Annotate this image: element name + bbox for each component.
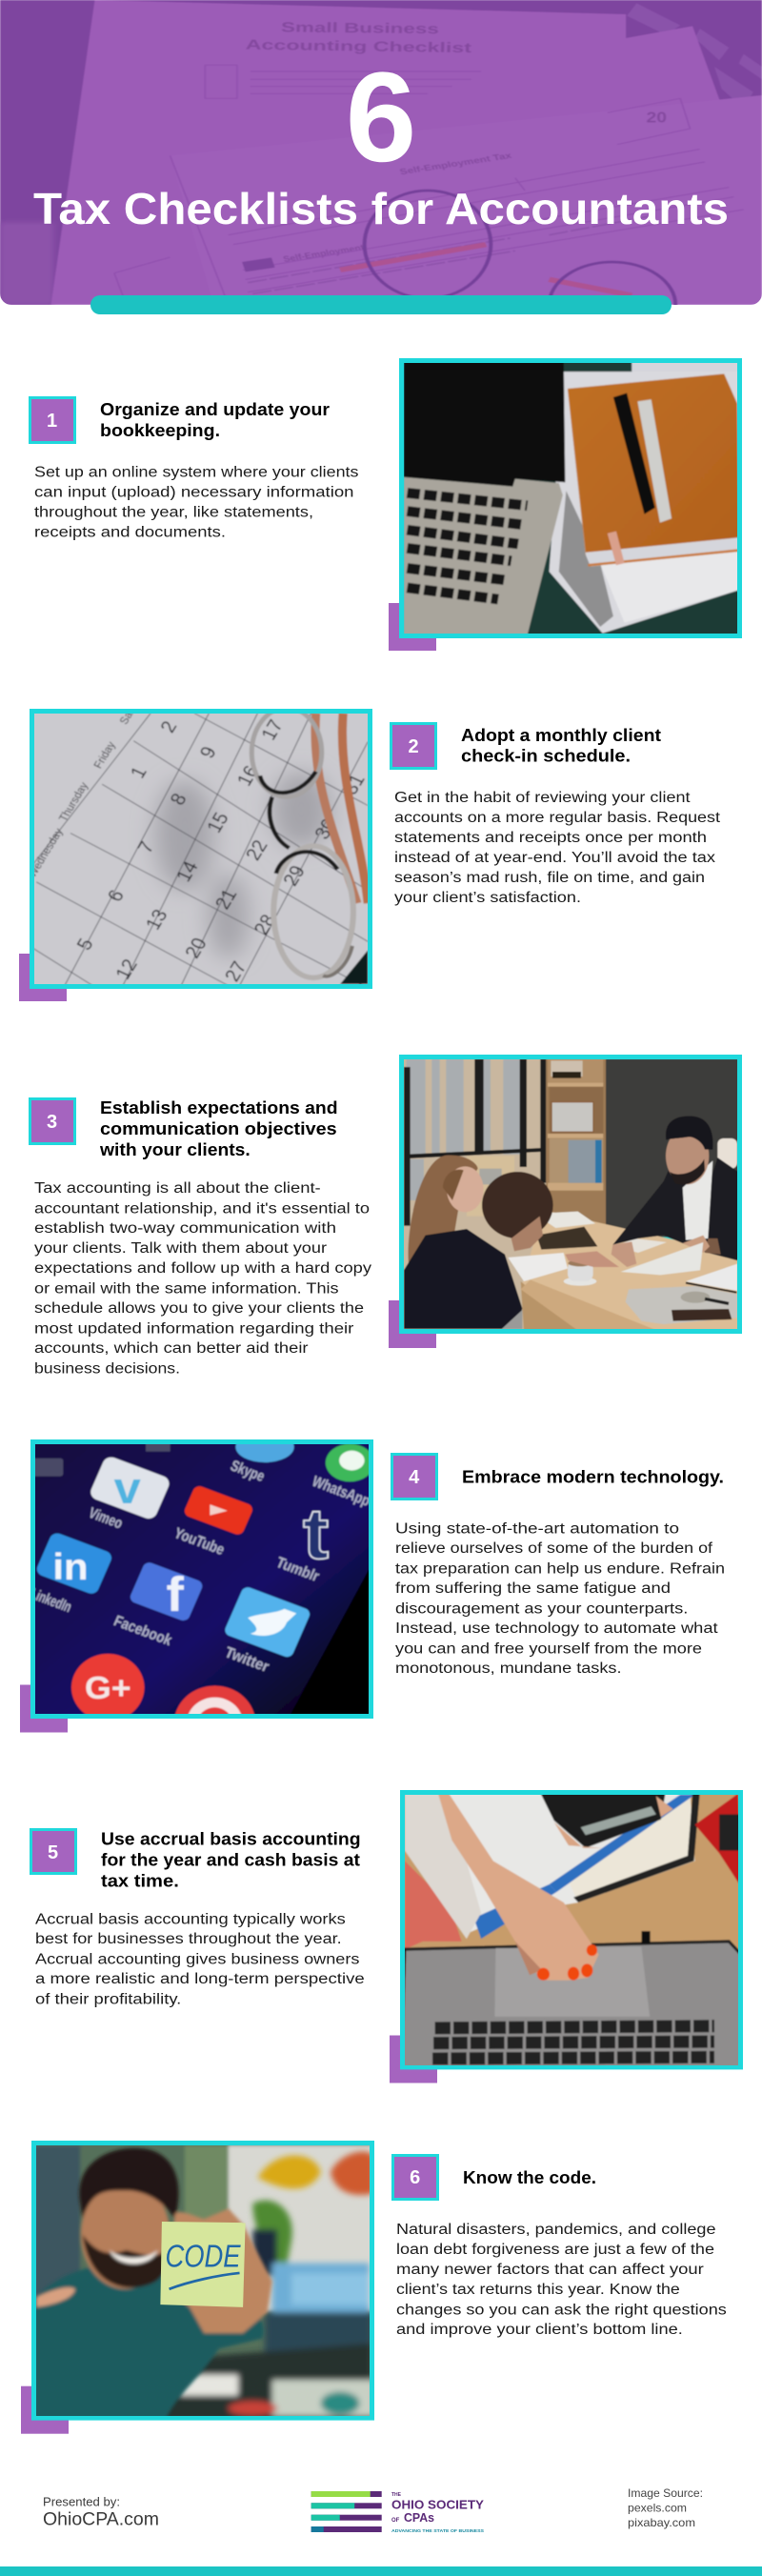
presented by: OhioCPA.com: [43, 2510, 159, 2530]
body text 2: statements and receipts once per month: [394, 830, 707, 846]
presented by: [43, 2496, 159, 2530]
body text 6: [396, 2222, 727, 2338]
body text 4: Using state-of-the-art automation to: [395, 1520, 679, 1538]
body text 1: Set up an online system where your clients: [34, 464, 359, 480]
body text 4: relieve ourselves of some of the burden of: [395, 1540, 713, 1557]
heading 3: communication objectives: [100, 1119, 337, 1138]
panel: step 1: [30, 354, 744, 651]
number badge 5: [30, 1829, 76, 1873]
number badge 2: 2: [408, 736, 419, 757]
image: calendar and glasses: 28: [251, 912, 281, 938]
banner photo: purple-tinted tax forms: 20: [647, 110, 667, 126]
image: calendar and glasses: 20: [181, 935, 211, 961]
body text 3: [34, 1180, 371, 1378]
heading 5: Use accrual basis accounting: [101, 1830, 361, 1849]
body text 4: tax preparation can help us endure. Refrain: [395, 1560, 725, 1578]
image: calendar and glasses: 22: [242, 837, 272, 864]
image: phone with social apps: [20, 1439, 373, 1732]
image: phone with social apps: Tumblr: [273, 1554, 323, 1585]
body text 6: and improve your client’s bottom line.: [396, 2322, 683, 2338]
panel: step 6: [21, 2141, 727, 2434]
body text 3: expectations and follow up with a hard copy: [34, 1260, 371, 1277]
image: man holding CODE sticky note: [21, 2141, 376, 2434]
body text 1: receipts and documents.: [34, 524, 226, 540]
image: calendar and glasses: Thursday: [57, 780, 91, 823]
number badge 6: 6: [410, 2167, 420, 2188]
body text 2: Get in the habit of reviewing your client: [394, 790, 691, 806]
body text 4: you can and free yourself from the more: [395, 1640, 702, 1658]
main title: Tax Checklists for Accountants: [33, 184, 729, 233]
image: calendar and glasses: 16: [233, 763, 264, 790]
body text 3: accountant relationship, and it's essential to: [34, 1200, 370, 1218]
number badge 4: 4: [409, 1467, 420, 1488]
image: calendar and glasses: 21: [211, 886, 242, 913]
image: calendar and glasses: 17: [257, 716, 288, 743]
body text 1: throughout the year, like statements,: [34, 504, 313, 520]
heading 3: Establish expectations and: [100, 1098, 338, 1117]
body text 5: Accrual accounting gives business owners: [35, 1951, 360, 1967]
heading 1: Organize and update your: [100, 400, 330, 419]
body text 6: Natural disasters, pandemics, and college: [396, 2222, 716, 2238]
heading 5: [101, 1830, 361, 1891]
image: calendar and glasses: 9: [196, 744, 221, 761]
banner photo: purple-tinted tax forms: Small Business: [281, 20, 439, 37]
image: calendar and glasses: [19, 707, 374, 1001]
body text 5: [35, 1911, 365, 2007]
body text 4: from suffering the same fatigue and: [395, 1580, 671, 1597]
image: calendar and glasses: 1: [127, 764, 151, 781]
heading 2: Adopt a monthly client: [461, 726, 661, 745]
image: calendar and glasses: 15: [203, 810, 233, 836]
body text 3: schedule allows you to give your clients the: [34, 1300, 364, 1317]
image: calendar and glasses: 14: [172, 858, 203, 885]
number badge 1: 1: [47, 411, 57, 432]
logo: The Ohio Society of CPAs: ADVANCING THE STATE OF BUSINESS: [391, 2528, 484, 2533]
image: calendar and glasses: Wednesday: [26, 827, 66, 879]
body text 4: discouragement as your counterparts.: [395, 1600, 688, 1618]
number badge 4: [392, 1454, 436, 1499]
heading 4: Embrace modern technology.: [462, 1468, 724, 1487]
image: phone with social apps: G+: [85, 1671, 131, 1706]
image: calendar and glasses: 5: [73, 936, 98, 954]
heading 5: tax time.: [101, 1872, 179, 1891]
number badge 3: [30, 1099, 74, 1143]
header banner: [0, 0, 762, 348]
heading 6: Know the code.: [463, 2168, 596, 2187]
image: calendar and glasses: 30: [311, 815, 341, 842]
body text 6: client’s tax returns this year. Know the: [396, 2282, 680, 2298]
heading 2: [461, 726, 661, 766]
image: calendar and glasses: 29: [279, 862, 310, 890]
panel: step 4: [20, 1439, 724, 1732]
body text 3: your clients. Talk with them about your: [34, 1240, 327, 1257]
body text 6: changes so you can ask the right questions: [396, 2302, 727, 2319]
image source: Image Source:: [628, 2486, 703, 2500]
heading 2: check-in schedule.: [461, 747, 631, 766]
heading 3: [99, 1098, 338, 1159]
image: laptop and notebook: [389, 354, 744, 651]
image: calendar and glasses: 8: [167, 791, 191, 809]
image: phone with social apps: Skype: [228, 1457, 268, 1485]
image: hand on laptop with calculator: [390, 1790, 744, 2083]
image: calendar and glasses: 13: [142, 906, 172, 934]
image: calendar and glasses: 12: [111, 956, 142, 983]
number badge 6: [392, 2155, 438, 2199]
number badge 5: 5: [48, 1842, 58, 1863]
logo: The Ohio Society of CPAs: THE: [391, 2492, 402, 2498]
logo: The Ohio Society of CPAs: OF: [391, 2518, 400, 2524]
image: calendar and glasses: 7: [134, 838, 159, 856]
logo: The Ohio Society of CPAs: OHIO SOCIETY: [391, 2497, 484, 2511]
image: calendar and glasses: Sat: [118, 707, 137, 726]
logo: The Ohio Society of CPAs: CPAs: [404, 2510, 434, 2525]
body text 2: your client’s satisfaction.: [394, 890, 581, 906]
body text 3: establish two-way communication with: [34, 1220, 336, 1237]
body text 4: monotonous, mundane tasks.: [395, 1660, 621, 1677]
panel: step 3: [389, 1055, 742, 1348]
footer: [0, 2486, 762, 2576]
body text 3: business decisions.: [34, 1360, 180, 1378]
body text 6: many newer factors that can affect your: [396, 2262, 704, 2278]
body text 5: of their profitability.: [35, 1991, 181, 2007]
banner photo: purple-tinted tax forms: [0, 0, 762, 305]
image: phone with social apps: WhatsApp: [310, 1473, 372, 1510]
image: phone with social apps: Vimeo: [86, 1504, 126, 1532]
body text 2: season’s mad rush, file on time, and gain: [394, 870, 705, 886]
body text 1: can input (upload) necessary information: [34, 484, 354, 500]
body text 5: Accrual basis accounting typically works: [35, 1911, 346, 1927]
image: phone with social apps: YouTube: [171, 1524, 228, 1559]
image: phone with social apps: t: [303, 1494, 329, 1574]
heading 1: bookkeeping.: [100, 421, 220, 440]
image: phone with social apps: Facebook: [111, 1612, 175, 1649]
big number 6: 6: [346, 47, 416, 189]
body text 3: or email with the same information. This: [34, 1280, 339, 1298]
image: phone with social apps: LinkedIn: [28, 1585, 74, 1616]
image: calendar and glasses: 31: [339, 772, 370, 798]
heading 1: [100, 400, 330, 440]
body text 2: [394, 790, 721, 906]
banner photo: purple-tinted tax forms: Self-Employment: [282, 243, 366, 264]
body text 3: most updated information regarding their: [34, 1320, 353, 1338]
image: man holding CODE sticky note: CODE: [165, 2237, 242, 2274]
image: phone with social apps: in: [52, 1547, 89, 1588]
body text 4: [395, 1520, 725, 1677]
body text 3: accounts, which can better aid their: [34, 1340, 309, 1357]
image: phone with social apps: Twitter: [222, 1643, 272, 1676]
presented by: Presented by:: [43, 2496, 120, 2509]
number badge 2: [391, 724, 436, 768]
heading 5: for the year and cash basis at: [101, 1850, 360, 1869]
number badge 3: 3: [47, 1112, 57, 1133]
panel: step 5: [30, 1790, 744, 2083]
logo: The Ohio Society of CPAs: [311, 2491, 484, 2533]
image: calendar and glasses: 6: [104, 887, 129, 905]
image: phone with social apps: v: [113, 1464, 142, 1513]
body text 3: Tax accounting is all about the client-: [34, 1180, 321, 1197]
image source: [628, 2486, 703, 2529]
heading 3: with your clients.: [99, 1140, 251, 1159]
banner photo: purple-tinted tax forms: Accounting Checklist: [246, 37, 472, 56]
image source: pexels.com: [628, 2502, 687, 2515]
teal bar: [90, 295, 672, 314]
body text 6: loan debt forgiveness are just a few of the: [396, 2242, 714, 2258]
image source: pixabay.com: [628, 2516, 695, 2529]
panel: step 2: [19, 707, 721, 1001]
banner photo: purple-tinted tax forms: Self-Employment Tax: [399, 151, 513, 177]
image: client meeting: [389, 1055, 742, 1348]
body text 2: instead of at year-end. You’ll avoid the tax: [394, 850, 715, 866]
number badge 1: [30, 398, 74, 442]
bottom teal bar: [0, 2566, 762, 2576]
body text 2: accounts on a more regular basis. Request: [394, 810, 721, 826]
body text 5: best for businesses throughout the year.: [35, 1931, 342, 1947]
image: calendar and glasses: Friday: [92, 740, 118, 771]
image: phone with social apps: f: [166, 1568, 184, 1622]
body text 1: [34, 464, 359, 540]
body text 5: a more realistic and long-term perspective: [35, 1971, 365, 1987]
body text 4: Instead, use technology to automate what: [395, 1620, 718, 1637]
image: calendar and glasses: 27: [221, 958, 251, 985]
image: calendar and glasses: 2: [157, 718, 182, 736]
